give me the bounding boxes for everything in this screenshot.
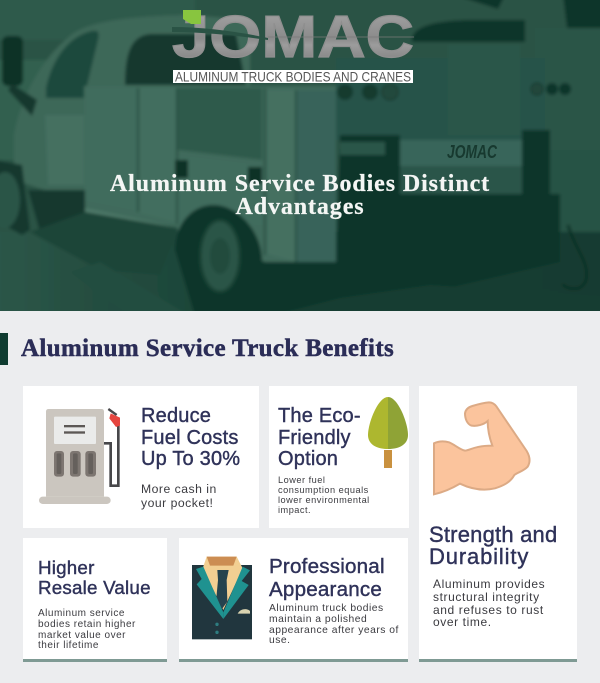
body text: Aluminum provides (433, 577, 545, 591)
rear cab wheel (0, 160, 30, 235)
heading: Higher (38, 557, 95, 578)
body text (38, 608, 136, 651)
heading (429, 522, 557, 569)
body text: maintain a polished (269, 614, 367, 625)
body text (278, 475, 370, 515)
heading: Option (278, 448, 338, 470)
heading: Professional (269, 555, 385, 578)
body text: over time. (433, 615, 492, 629)
panel: professional appearance (179, 538, 408, 662)
logo green swoosh (183, 10, 201, 24)
body text: appearance after years of (269, 625, 399, 636)
heading: Durability (429, 544, 529, 569)
icon: flexed arm (433, 401, 531, 496)
body text: Lower fuel (278, 475, 325, 485)
front wheel (175, 205, 262, 316)
ground shadow and hose (30, 212, 178, 275)
hero title (110, 171, 490, 220)
JOMAC logo (172, 6, 414, 84)
body text (269, 603, 399, 646)
heading: Resale Value (38, 577, 151, 598)
accent bar (179, 659, 408, 662)
heading: Strength and (429, 522, 557, 547)
rear body (336, 58, 545, 140)
body text: Aluminum service (38, 608, 125, 619)
icon: tree (368, 397, 408, 468)
body text: bodies retain higher (38, 619, 136, 630)
panel: higher resale value (23, 538, 167, 662)
heading (278, 405, 361, 470)
body text: lower environmental (278, 495, 370, 505)
body text (433, 577, 545, 629)
heading: Friendly (278, 426, 351, 448)
accent bar (419, 659, 577, 662)
panel: reduce fuel costs (23, 386, 259, 528)
heading: Up To 30% (141, 448, 240, 470)
truck photo backdrop (0, 0, 600, 311)
body text: More cash in (141, 482, 217, 496)
body text: and refuses to rust (433, 603, 544, 617)
heading (38, 557, 151, 598)
rear shadow mass (230, 135, 560, 316)
section marker (0, 333, 8, 365)
heading: The Eco- (278, 405, 361, 427)
body text: structural integrity (433, 590, 540, 604)
heading: Appearance (269, 578, 382, 601)
hero title: Advantages (235, 194, 364, 220)
heading: Reduce (141, 405, 211, 427)
heading (268, 555, 385, 601)
tail lights (337, 84, 353, 100)
icon: fuel pump (39, 408, 120, 504)
hero photo banner (0, 0, 600, 311)
body text: impact. (278, 505, 311, 515)
cab (14, 15, 250, 190)
hero title: Aluminum Service Bodies Distinct (110, 171, 490, 197)
body text: use. (269, 635, 290, 646)
body text: consumption equals (278, 485, 369, 495)
icon: suit (192, 556, 252, 640)
body text: market value over (38, 630, 126, 641)
body text: your pocket! (141, 496, 213, 510)
panel: strength and durability (419, 386, 577, 662)
body text: Aluminum truck bodies (269, 603, 384, 614)
service body (84, 86, 336, 272)
section heading: Aluminum Service Truck Benefits (21, 335, 394, 362)
panel: eco-friendly option (269, 386, 409, 528)
heading: Fuel Costs (141, 426, 239, 448)
plate lettering on truck: JOMAC (447, 142, 498, 162)
heading (141, 405, 240, 470)
body text (141, 482, 217, 510)
accent bar (23, 659, 167, 662)
body text: their lifetime (38, 640, 99, 651)
